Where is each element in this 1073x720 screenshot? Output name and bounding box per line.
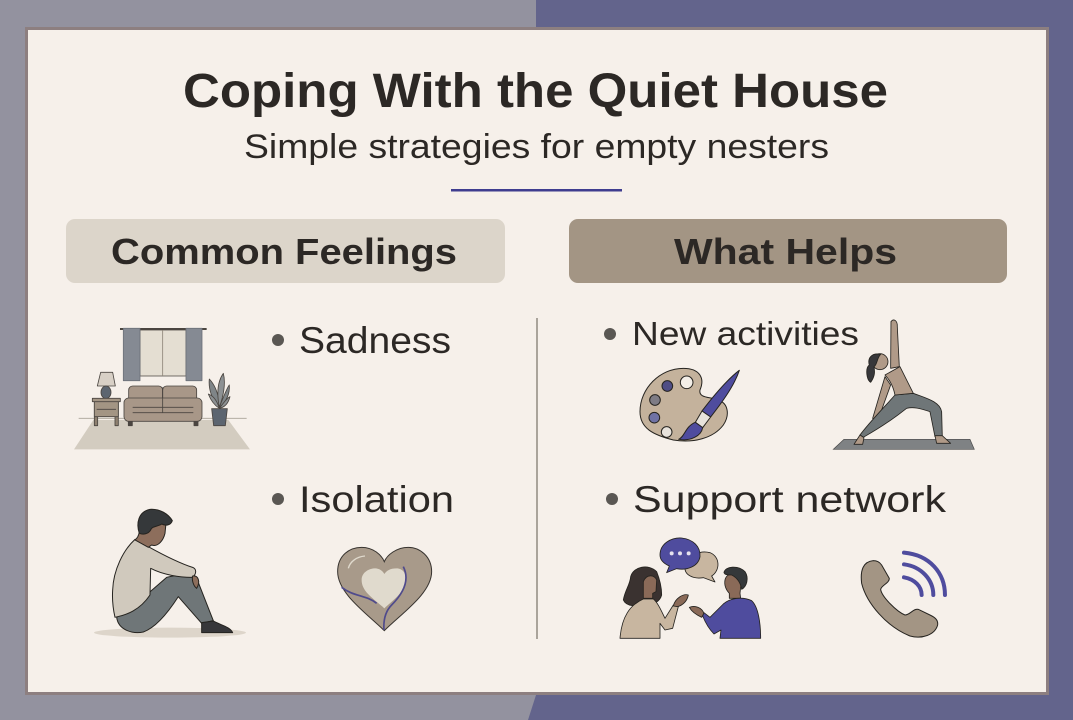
bullet: Sadness: Sadness: [299, 320, 451, 361]
icon: two people talking: [620, 538, 761, 638]
panel: Common Feelings header: Common Feelings: [111, 231, 457, 272]
panel: What Helps header: [569, 219, 1007, 283]
title: Coping With the Quiet House: [183, 65, 888, 118]
bullet: New activities: New activities: [632, 315, 859, 352]
icon: telephone with signal: [861, 553, 945, 637]
panel: What Helps header: What Helps: [674, 231, 897, 272]
icon: heart: [338, 547, 432, 631]
bullet: Isolation: Isolation: [299, 479, 454, 520]
icon: living room: [74, 328, 250, 449]
panel: Common Feelings header: [66, 219, 505, 283]
bullet: Support network: Support network: [633, 479, 947, 520]
icon: yoga pose: [833, 320, 974, 449]
subtitle: Simple strategies for empty nesters: [244, 128, 829, 166]
icon: paint palette and brush: [640, 368, 739, 441]
icon: seated person: [94, 509, 246, 638]
